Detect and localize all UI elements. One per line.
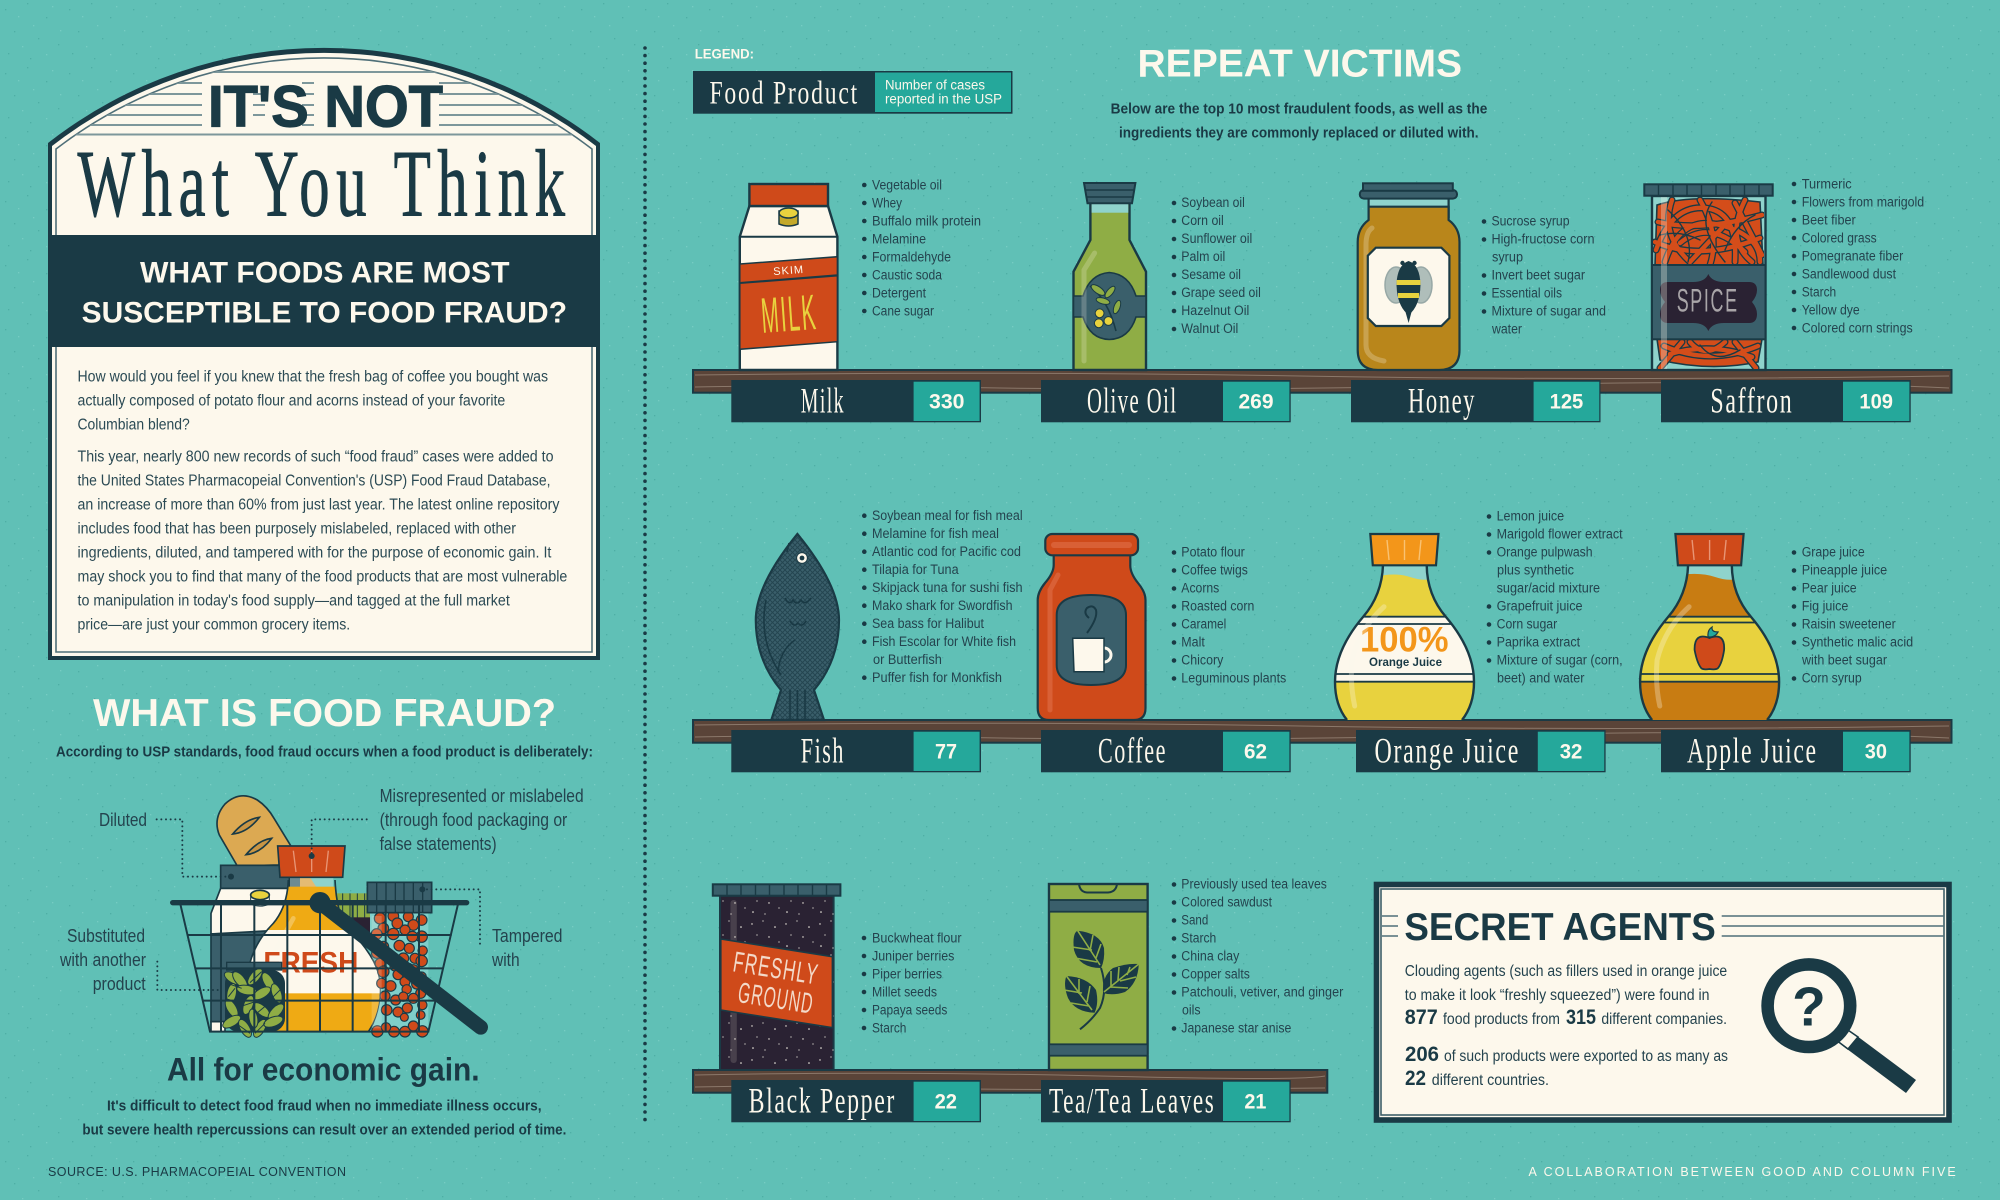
- text: clouding agents: [1405, 963, 1728, 1090]
- icon: fish: [756, 534, 839, 720]
- intro text: may shock you to find that many of the food products that are most vulnerable: [78, 568, 567, 585]
- list: olive oil adulterants: Sesame oil: [1181, 267, 1241, 282]
- text: clouding agents: of such products were exported to as many as: [1444, 1048, 1728, 1065]
- list: tea adulterants: Colored sawdust: [1181, 895, 1272, 910]
- list: coffee adulterants: Acorns: [1181, 581, 1220, 596]
- list: fish substitutes: Fish Escolar for White fish: [872, 634, 1016, 649]
- list: pepper adulterants: Papaya seeds: [872, 1002, 948, 1017]
- heading: all for economic gain: All for economic gain.: [167, 1052, 480, 1088]
- label: milk 330: Milk: [801, 380, 845, 420]
- labels: fraud types: product: [93, 974, 146, 994]
- icon: black pepper tin: FRESHLY: [731, 946, 821, 992]
- basket wires: [180, 903, 458, 1032]
- icon: baguette: [217, 796, 293, 866]
- intro text: ingredients, diluted, and tampered with for the purpose of economic gain. It: [78, 544, 552, 561]
- labels: fraud types: Substituted: [67, 926, 145, 946]
- list: saffron adulterants: Colored grass: [1802, 230, 1877, 245]
- title: What You Think: What You Think: [78, 130, 572, 236]
- text: clouding agents: different companies.: [1601, 1011, 1727, 1028]
- icon: orange juice bottle: 100%: [1360, 621, 1449, 660]
- list: honey adulterants: [1484, 214, 1606, 337]
- list: milk adulterants: Caustic soda: [872, 268, 942, 282]
- legend: Food Product: [710, 75, 859, 111]
- list: orange juice adulterants: beet) and water: [1497, 671, 1585, 686]
- label: black pepper 22: 22: [935, 1090, 957, 1113]
- icon: coffee jar: [1038, 534, 1146, 720]
- list: saffron adulterants: Pomegranate fiber: [1802, 248, 1904, 263]
- label: honey 125: 125: [1550, 390, 1584, 413]
- text: clouding agents: 315: [1566, 1006, 1596, 1029]
- label: saffron 109: 109: [1859, 390, 1893, 413]
- list: orange juice adulterants: [1489, 509, 1623, 686]
- title: It's Not: IT'S NOT: [208, 74, 443, 140]
- list: orange juice adulterants: Grapefruit juice: [1497, 599, 1583, 614]
- list: apple juice adulterants: Pineapple juice: [1802, 563, 1887, 578]
- label: honey 125: [1351, 380, 1600, 422]
- list: milk adulterants: Melamine: [872, 232, 926, 246]
- shelf: row 1: [693, 370, 1952, 393]
- list: olive oil adulterants: Corn oil: [1181, 213, 1224, 228]
- labels: fraud types: Diluted: [99, 810, 147, 830]
- legend: Number of cases: [885, 77, 985, 92]
- intro text: includes food that has been purposely mislabeled, replaced with other: [78, 520, 516, 537]
- labels: fraud types: false statements): [380, 834, 497, 854]
- list: honey adulterants: Invert beet sugar: [1492, 268, 1585, 283]
- list: olive oil adulterants: Grape seed oil: [1181, 285, 1261, 300]
- label: black pepper 22: Black Pepper: [749, 1080, 896, 1120]
- list: fish substitutes: Atlantic cod for Pacific cod: [872, 544, 1021, 559]
- list: olive oil adulterants: Sunflower oil: [1181, 231, 1252, 246]
- label: honey 125: Honey: [1408, 380, 1476, 420]
- list: tea adulterants: [1174, 877, 1344, 1036]
- list: saffron adulterants: Beet fiber: [1802, 212, 1856, 227]
- icon: juice bottle: [243, 846, 387, 1033]
- label: fish 77: [731, 730, 981, 772]
- label: tea 21: 21: [1244, 1090, 1267, 1113]
- shelf: row 3: [693, 1070, 1327, 1093]
- list: apple juice adulterants: with beet sugar: [1801, 653, 1887, 668]
- list: milk adulterants: Whey: [872, 196, 902, 210]
- intro text: How would you feel if you knew that the fresh bag of coffee you bought was: [78, 368, 548, 386]
- intro text: the United States Pharmacopeial Convention's (USP) Food Fraud Database,: [78, 472, 550, 489]
- icon: apple juice bottle: [1635, 534, 1785, 725]
- heading: secret agents: [1382, 906, 1944, 949]
- list: pepper adulterants: Millet seeds: [872, 984, 937, 999]
- list: orange juice adulterants: plus synthetic: [1497, 563, 1574, 578]
- text: health repercussions: [82, 1098, 566, 1138]
- list: tea adulterants: oils: [1182, 1003, 1201, 1018]
- text: repeat victims intro: Below are the top 10 most fraudulent foods, as well as the: [1111, 101, 1487, 117]
- list: fish substitutes: Soybean meal for fish meal: [872, 508, 1023, 523]
- subtitle band: SUSCEPTIBLE TO FOOD FRAUD?: [82, 296, 567, 330]
- list: saffron adulterants: [1794, 176, 1924, 335]
- illustration: grocery basket: [157, 796, 481, 1039]
- list: apple juice adulterants: Raisin sweetener: [1802, 617, 1896, 632]
- list: apple juice adulterants: Grape juice: [1802, 545, 1865, 560]
- list: milk adulterants: [864, 178, 981, 318]
- icon: milk carton: [740, 184, 837, 370]
- label: orange juice 32: 32: [1560, 740, 1582, 763]
- icon: magnifying glass: ?: [1792, 976, 1826, 1038]
- label: olive oil 269: Olive Oil: [1087, 380, 1178, 420]
- list: apple juice adulterants: Fig juice: [1802, 599, 1848, 614]
- list: orange juice adulterants: Marigold flower extract: [1497, 527, 1623, 542]
- list: honey adulterants: Mixture of sugar and: [1492, 304, 1606, 319]
- list: tea adulterants: Patchouli, vetiver, and ginger: [1181, 985, 1344, 1000]
- list: fish substitutes: or Butterfish: [873, 652, 942, 667]
- list: milk adulterants: Detergent: [872, 286, 926, 300]
- intro text: This year, nearly 800 new records of such “food fraud” cases were added to: [78, 448, 554, 465]
- list: milk adulterants: Vegetable oil: [872, 178, 942, 192]
- label: coffee 62: [1041, 730, 1291, 772]
- text: clouding agents: different countries.: [1432, 1072, 1549, 1089]
- intro text: [78, 368, 567, 633]
- text: clouding agents: 22: [1405, 1067, 1426, 1090]
- subtitle band: [48, 235, 600, 347]
- list: saffron adulterants: Starch: [1802, 284, 1836, 299]
- list: pepper adulterants: Starch: [872, 1020, 906, 1035]
- heading: repeat victims: REPEAT VICTIMS: [1138, 43, 1462, 86]
- list: apple juice adulterants: Corn syrup: [1802, 671, 1862, 686]
- icon: tea tin: [1049, 884, 1148, 1070]
- list: fish substitutes: Sea bass for Halibut: [872, 616, 984, 631]
- list: tea adulterants: Copper salts: [1181, 967, 1250, 982]
- callout leader lines: [157, 819, 480, 990]
- text: clouding agents: 877: [1405, 1006, 1438, 1029]
- icon: juice bottle: FRESH: [263, 947, 358, 980]
- text: health repercussions: It's difficult to detect food fraud when no immediate illness occurs,: [107, 1098, 542, 1114]
- text: clouding agents: Clouding agents (such as fillers used in orange juice: [1405, 963, 1727, 980]
- label: orange juice 32: Orange Juice: [1374, 730, 1520, 770]
- list: coffee adulterants: Leguminous plants: [1181, 671, 1287, 686]
- label: milk 330: 330: [929, 390, 964, 413]
- text: clouding agents: to make it look “freshly squeezed”) were found in: [1405, 987, 1710, 1004]
- list: olive oil adulterants: [1174, 195, 1261, 336]
- intro text: actually composed of potato flour and acorns instead of your favorite: [78, 392, 505, 410]
- list: coffee adulterants: Chicory: [1181, 653, 1224, 668]
- panel: title card: [48, 48, 600, 660]
- icon: saffron jar: [1644, 184, 1773, 370]
- label: tea 21: Tea/Tea Leaves: [1049, 1080, 1215, 1120]
- icon: spice jar with red berries: [367, 882, 432, 1037]
- list: saffron adulterants: Colored corn strings: [1802, 320, 1913, 335]
- text: USP definition: According to USP standards, food fraud occurs when a food product is deliberately:: [56, 744, 593, 760]
- list: saffron adulterants: Sandlewood dust: [1802, 266, 1896, 281]
- icon: milk carton: SKIM: [773, 264, 805, 278]
- list: honey adulterants: High-fructose corn: [1492, 232, 1594, 247]
- list: apple juice adulterants: Pear juice: [1802, 581, 1857, 596]
- icon: honey jar: [1358, 183, 1460, 370]
- legend: reported in the USP: [885, 91, 1002, 106]
- intro text: an increase of more than 60% from just last year. The latest online repository: [78, 496, 560, 513]
- icon: saffron jar: SPICE: [1677, 283, 1739, 319]
- list: milk adulterants: Cane sugar: [872, 304, 934, 318]
- list: honey adulterants: Sucrose syrup: [1492, 214, 1570, 229]
- label: olive oil 269: [1041, 380, 1291, 422]
- list: fish substitutes: Tilapia for Tuna: [872, 562, 959, 577]
- list: pepper adulterants: Buckwheat flour: [872, 930, 962, 945]
- list: fish substitutes: Puffer fish for Monkfish: [872, 670, 1002, 685]
- shelf: row 2: [693, 720, 1952, 743]
- list: honey adulterants: Essential oils: [1492, 286, 1562, 301]
- list: orange juice adulterants: Mixture of sugar (corn,: [1497, 653, 1623, 668]
- label: olive oil 269: 269: [1238, 390, 1274, 413]
- intro text: to manipulation in today's food supply—and tagged at the full market: [78, 592, 510, 609]
- legend: LEGEND:: [695, 47, 754, 62]
- labels: fraud types: [59, 786, 584, 994]
- list: tea adulterants: Previously used tea leaves: [1181, 877, 1327, 892]
- list: orange juice adulterants: Corn sugar: [1497, 617, 1558, 632]
- source: SOURCE: U.S. PHARMACOPEIAL CONVENTION: [48, 1165, 346, 1179]
- list: milk adulterants: Formaldehyde: [872, 250, 951, 264]
- label: coffee 62: 62: [1244, 740, 1267, 763]
- label: saffron 109: Saffron: [1710, 380, 1793, 420]
- heading: what is food fraud: WHAT IS FOOD FRAUD?: [93, 692, 556, 735]
- icon: milk carton: MILK: [759, 284, 819, 344]
- list: olive oil adulterants: Palm oil: [1181, 249, 1225, 264]
- text: clouding agents: 206: [1405, 1043, 1439, 1066]
- list: coffee adulterants: Roasted corn: [1181, 599, 1254, 614]
- basket rail and handle: [173, 892, 481, 1027]
- icon: magnifying glass: [1768, 964, 1916, 1093]
- list: honey adulterants: syrup: [1492, 250, 1523, 265]
- labels: fraud types: (through food packaging or: [380, 810, 567, 830]
- dotted vertical divider: [643, 48, 647, 1126]
- list: orange juice adulterants: Paprika extract: [1497, 635, 1580, 650]
- labels: fraud types: Tampered: [492, 926, 562, 946]
- list: fish substitutes: Mako shark for Swordfish: [872, 598, 1012, 613]
- list: coffee adulterants: [1174, 545, 1287, 686]
- labels: fraud types: with another: [59, 950, 146, 970]
- icon: milk carton: [211, 865, 289, 1032]
- label: apple juice 30: Apple Juice: [1687, 730, 1818, 770]
- labels: fraud types: with: [491, 950, 520, 970]
- intro text: Columbian blend?: [78, 416, 190, 433]
- label: fish 77: Fish: [801, 730, 845, 770]
- list: tea adulterants: Starch: [1181, 931, 1216, 946]
- icon: black pepper tin: [713, 884, 840, 1070]
- list: orange juice adulterants: Orange pulpwash: [1497, 545, 1593, 560]
- list: apple juice adulterants: Synthetic malic acid: [1802, 635, 1913, 650]
- list: honey adulterants: water: [1491, 322, 1522, 337]
- list: fish substitutes: Skipjack tuna for sushi fish: [872, 580, 1023, 595]
- icon: olive oil bottle: [1074, 183, 1146, 370]
- text: repeat victims intro: ingredients they are commonly replaced or diluted with.: [1119, 125, 1478, 141]
- labels: fraud types: Misrepresented or mislabeled: [380, 786, 584, 806]
- intro text: price—are just your common grocery items.: [78, 616, 350, 633]
- list: saffron adulterants: Yellow dye: [1802, 302, 1860, 317]
- label: apple juice 30: 30: [1865, 740, 1887, 763]
- icon: black pepper tin: GROUND: [736, 977, 816, 1021]
- list: orange juice adulterants: sugar/acid mixture: [1497, 581, 1600, 596]
- list: olive oil adulterants: Hazelnut Oil: [1181, 303, 1249, 318]
- list: olive oil adulterants: Soybean oil: [1181, 195, 1245, 210]
- subtitle band: WHAT FOODS ARE MOST: [140, 256, 510, 290]
- list: olive oil adulterants: Walnut Oil: [1181, 321, 1238, 336]
- list: pepper adulterants: Juniper berries: [872, 948, 955, 963]
- icon: green tin behind: [335, 893, 373, 932]
- list: fish substitutes: Melamine for fish meal: [872, 526, 999, 541]
- heading: secret agents: SECRET AGENTS: [1404, 906, 1716, 949]
- icon: orange juice bottle: Orange Juice: [1369, 657, 1442, 669]
- list: orange juice adulterants: Lemon juice: [1497, 509, 1564, 524]
- text: health repercussions: but severe health repercussions can result over an extended period of time.: [82, 1122, 566, 1138]
- credit: A COLLABORATION BETWEEN GOOD AND COLUMN FIVE: [1528, 1165, 1956, 1179]
- icon: orange juice bottle: [1330, 534, 1480, 725]
- list: coffee adulterants: Caramel: [1181, 617, 1226, 632]
- list: tea adulterants: Sand: [1181, 913, 1208, 928]
- label: milk 330: [731, 380, 981, 422]
- list: fish substitutes: [864, 508, 1023, 685]
- list: pepper adulterants: Piper berries: [872, 966, 942, 981]
- label: saffron 109: [1661, 380, 1911, 422]
- list: saffron adulterants: Turmeric: [1802, 176, 1852, 191]
- text: repeat victims intro: [1111, 101, 1487, 141]
- text: clouding agents: food products from: [1443, 1011, 1560, 1028]
- legend: [693, 47, 1012, 114]
- list: pepper adulterants: [864, 930, 962, 1035]
- list: coffee adulterants: Malt: [1181, 635, 1205, 650]
- list: tea adulterants: Japanese star anise: [1181, 1021, 1291, 1036]
- icon: herb jar: [221, 962, 286, 1039]
- label: fish 77: 77: [935, 740, 957, 763]
- list: tea adulterants: China clay: [1181, 949, 1240, 964]
- list: apple juice adulterants: [1794, 545, 1913, 686]
- list: coffee adulterants: Coffee twigs: [1181, 563, 1248, 578]
- panel: secret agents: [1376, 884, 1949, 1120]
- label: coffee 62: Coffee: [1098, 730, 1167, 770]
- list: coffee adulterants: Potato flour: [1181, 545, 1245, 560]
- list: saffron adulterants: Flowers from marigold: [1802, 194, 1924, 209]
- list: milk adulterants: Buffalo milk protein: [872, 214, 981, 228]
